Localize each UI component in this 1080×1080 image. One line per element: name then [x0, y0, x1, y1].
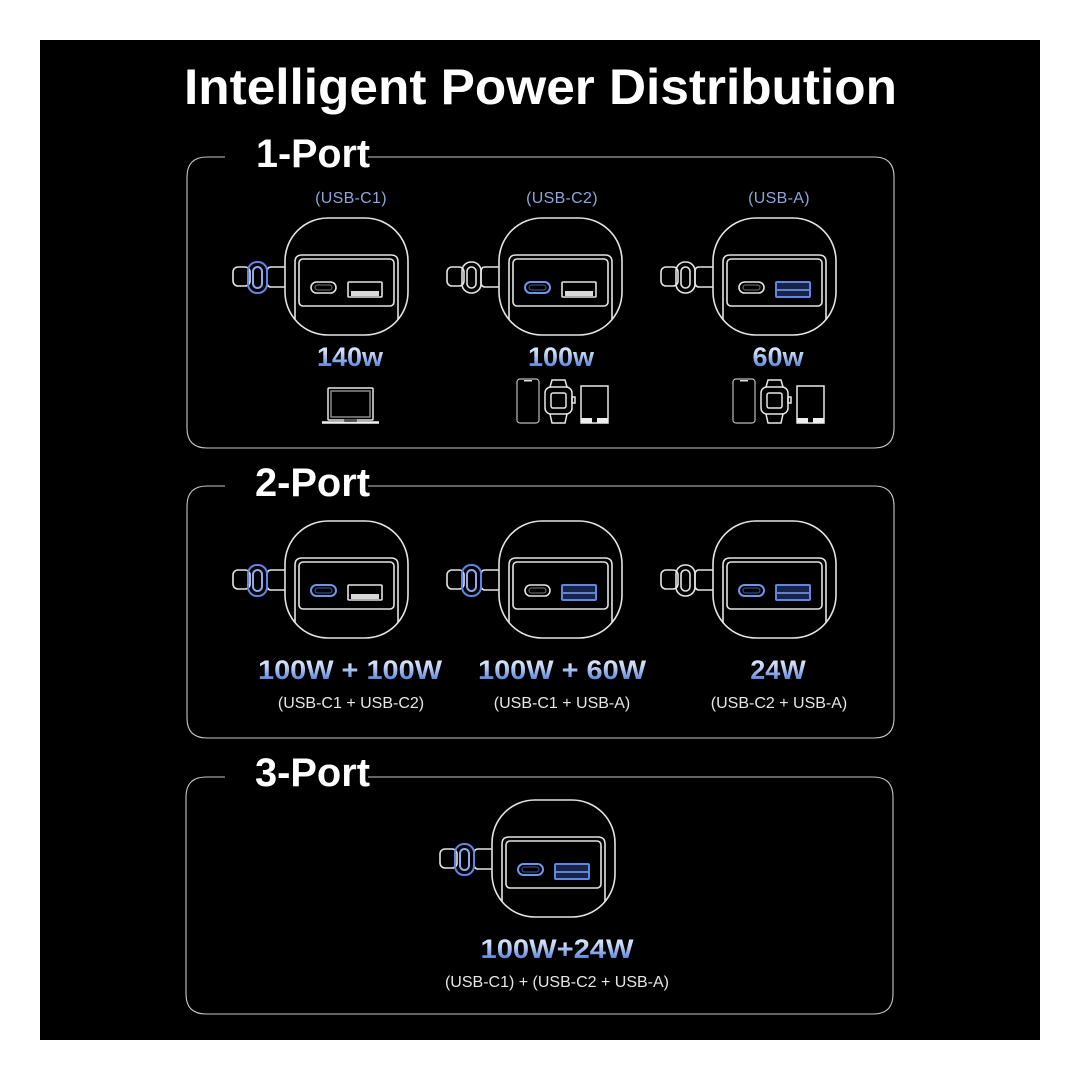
icons: phone, watch, tablet [517, 379, 608, 423]
panel: 1-Port [187, 132, 894, 448]
wattage: 140w: 140w [317, 342, 384, 372]
ports: USB-C1 + USB-C2: (USB-C1 + USB-C2) [278, 695, 424, 712]
title: Intelligent Power Distribution [184, 59, 897, 115]
charger: all ports active [440, 800, 615, 917]
port label: USB-C1: (USB-C1) [315, 190, 387, 207]
ports: USB-C2 + USB-A: (USB-C2 + USB-A) [711, 695, 847, 712]
charger: USB-A active [661, 218, 836, 335]
ports: USB-C1 + USB-C2 + USB-A: (USB-C1) + (USB-C2 + USB-A) [445, 974, 669, 991]
wattage: 100W+24W: 100W+24W [480, 934, 634, 964]
panel outline: 2-Port [187, 486, 894, 738]
wattage: 60w: 60w [752, 342, 805, 372]
heading: 2-Port: 2-Port [255, 461, 370, 505]
panel outline: 1-Port [187, 157, 894, 448]
ports: USB-C1 + USB-A: (USB-C1 + USB-A) [494, 695, 630, 712]
icon: laptop [322, 388, 379, 422]
panel: 2-Port [187, 461, 894, 738]
panel outline: 3-Port [186, 777, 893, 1014]
wattage: 100w: 100w [528, 342, 595, 372]
wattage: 100W + 100W: 100W + 100W [258, 655, 443, 685]
charger: USB-C1 and USB-A active [447, 521, 622, 638]
heading: 1-Port: 1-Port [256, 132, 370, 176]
port label: USB-C2: (USB-C2) [526, 190, 598, 207]
charger: USB-C1 and USB-C2 active [233, 521, 408, 638]
wattage: 100W + 60W: 100W + 60W [478, 655, 647, 685]
icons: phone, watch, tablet [733, 379, 824, 423]
wattage: 24W: 24W [750, 655, 806, 685]
charger: USB-C2 and USB-A active [661, 521, 836, 638]
charger: USB-C2 active [447, 218, 622, 335]
port label: USB-A: (USB-A) [748, 190, 810, 207]
heading: 3-Port: 3-Port [255, 751, 370, 795]
charger: USB-C1 active [233, 218, 408, 335]
panel: 3-Port [186, 751, 893, 1014]
